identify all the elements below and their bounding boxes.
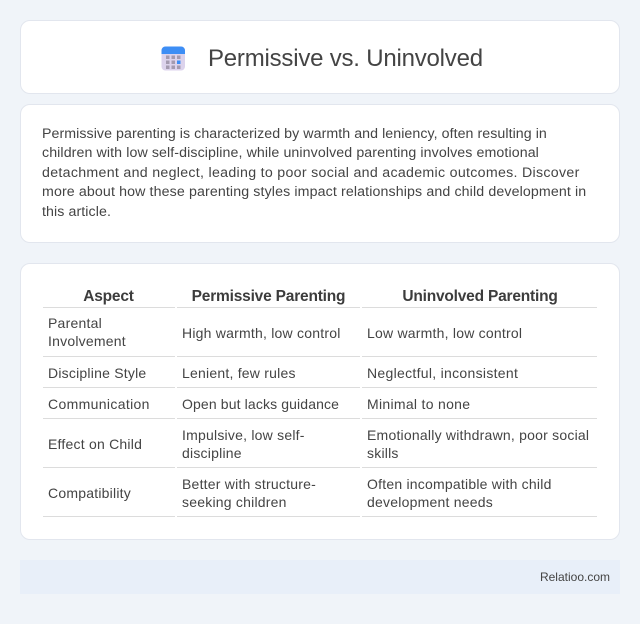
row: discipline style: Neglectful, inconsistent: [367, 365, 518, 381]
row: discipline style: Discipline Style: [48, 365, 146, 381]
row: communication: Communication: [48, 396, 150, 412]
table header: Uninvolved Parenting: [402, 288, 558, 305]
row: communication: Minimal to none: [367, 396, 470, 412]
icon: calendar: [162, 46, 185, 70]
row: parental involvement: High warmth, low control: [182, 325, 341, 341]
table header: [83, 288, 558, 305]
row: parental involvement: Low warmth, low control: [367, 325, 522, 341]
intro paragraph: detachment and neglect, leading to poor social and academic outcomes. Discover: [42, 165, 580, 181]
row: effect on child: skills: [367, 445, 399, 461]
panel: intro text: [20, 104, 620, 243]
row: discipline style: Lenient, few rules: [182, 365, 296, 381]
table header: Permissive Parenting: [192, 288, 345, 305]
intro paragraph: [42, 126, 586, 220]
row: compatibility: development needs: [367, 494, 493, 510]
panel: comparison table: [20, 263, 620, 540]
row: communication: Open but lacks guidance: [182, 396, 339, 412]
row: parental involvement: Parental: [48, 315, 102, 331]
intro paragraph: this article.: [42, 204, 111, 220]
row: compatibility: [48, 476, 552, 510]
row: effect on child: Effect on Child: [48, 436, 142, 452]
row: compatibility: Often incompatible with child: [367, 476, 552, 492]
row: parental involvement: Involvement: [48, 333, 126, 349]
row: compatibility: seeking children: [182, 494, 287, 510]
intro paragraph: children with low self-discipline, while uninvolved parenting involves emotional: [42, 145, 539, 161]
row: communication: [48, 396, 470, 412]
row: effect on child: discipline: [182, 445, 242, 461]
intro paragraph: Permissive parenting is characterized by warmth and leniency, often resulting in: [42, 126, 547, 142]
row: compatibility: Better with structure-: [182, 476, 316, 492]
intro paragraph: more about how these parenting styles impact relationships and child development in: [42, 184, 586, 200]
row: compatibility: Compatibility: [48, 485, 131, 501]
footer credit: Relatioo.com: [540, 570, 610, 584]
title: Permissive vs. Uninvolved: [208, 45, 483, 72]
table header: Aspect: [83, 288, 134, 305]
row: effect on child: Emotionally withdrawn, poor social: [367, 427, 589, 443]
footer bar: [20, 560, 620, 594]
panel: title card: [20, 20, 620, 94]
row: effect on child: [48, 427, 589, 461]
row: parental involvement: [48, 315, 522, 349]
row: discipline style: [48, 365, 518, 381]
row: effect on child: Impulsive, low self-: [182, 427, 305, 443]
